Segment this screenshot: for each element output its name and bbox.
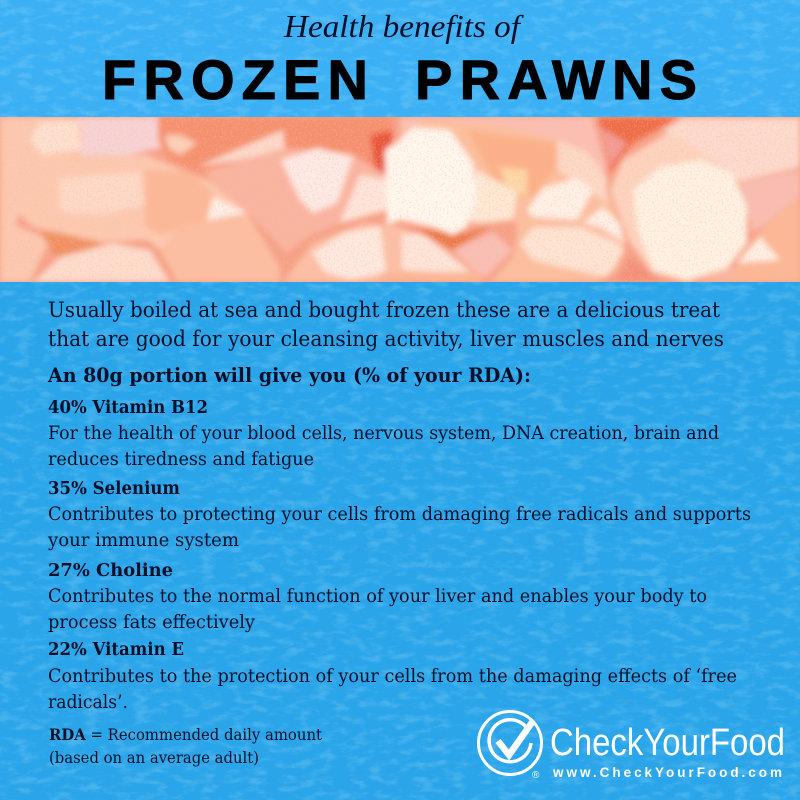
photo: frozen prawns (0, 117, 800, 282)
nutrient: Vitamin B12: For the health of your blood cells, nervous system, DNA creation, brain and (48, 423, 719, 444)
nutrient: Choline: Contributes to the normal function of your liver and enables your body to (48, 586, 707, 607)
nutrient: Vitamin E (48, 640, 737, 713)
nutrient: Selenium: Contributes to protecting your cells from damaging free radicals and supports (48, 504, 751, 525)
nutrient: Vitamin E: 22% Vitamin E (48, 640, 184, 660)
nutrient: Vitamin E: radicals’. (48, 692, 128, 713)
nutrient: Selenium (47, 479, 751, 551)
nutrient: Choline: process fats effectively (48, 612, 256, 633)
logo: CheckYourFood (478, 712, 785, 781)
nutrient: Choline (48, 561, 707, 633)
nutrient: Vitamin E: Contributes to the protection of your cells from the damaging effects of ‘free (48, 666, 737, 687)
intro text (48, 298, 724, 352)
registered mark: ® (532, 770, 540, 781)
nutrient: Vitamin B12: reduces tiredness and fatigue (48, 449, 314, 470)
intro text: Usually boiled at sea and bought frozen these are a delicious treat (48, 298, 720, 323)
nutrient: Selenium: your immune system (47, 530, 239, 551)
title: Health benefits of: Health benefits of (283, 8, 524, 44)
heading: portion: An 80g portion will give you (% of your RDA): (47, 363, 531, 387)
nutrient: Vitamin B12 (48, 398, 719, 470)
nutrient: Choline: 27% Choline (48, 561, 173, 581)
nutrient: Vitamin B12: 40% Vitamin B12 (48, 398, 208, 418)
title: Frozen Prawns (102, 48, 697, 111)
logo url: www.CheckYourFood.com (552, 765, 782, 780)
footnote: RDA: RDA = Recommended daily amount (49, 725, 323, 744)
intro text: that are good for your cleansing activity, liver muscles and nerves (48, 327, 724, 352)
footnote: RDA (49, 725, 323, 767)
icon: check mark in circle (478, 712, 542, 774)
nutrient: Selenium: 35% Selenium (48, 479, 180, 499)
footnote: RDA: (based on an average adult) (49, 749, 259, 767)
title: Frozen Prawns: FROZEN (102, 48, 368, 111)
title: Frozen Prawns: PRAWNS (415, 48, 697, 111)
